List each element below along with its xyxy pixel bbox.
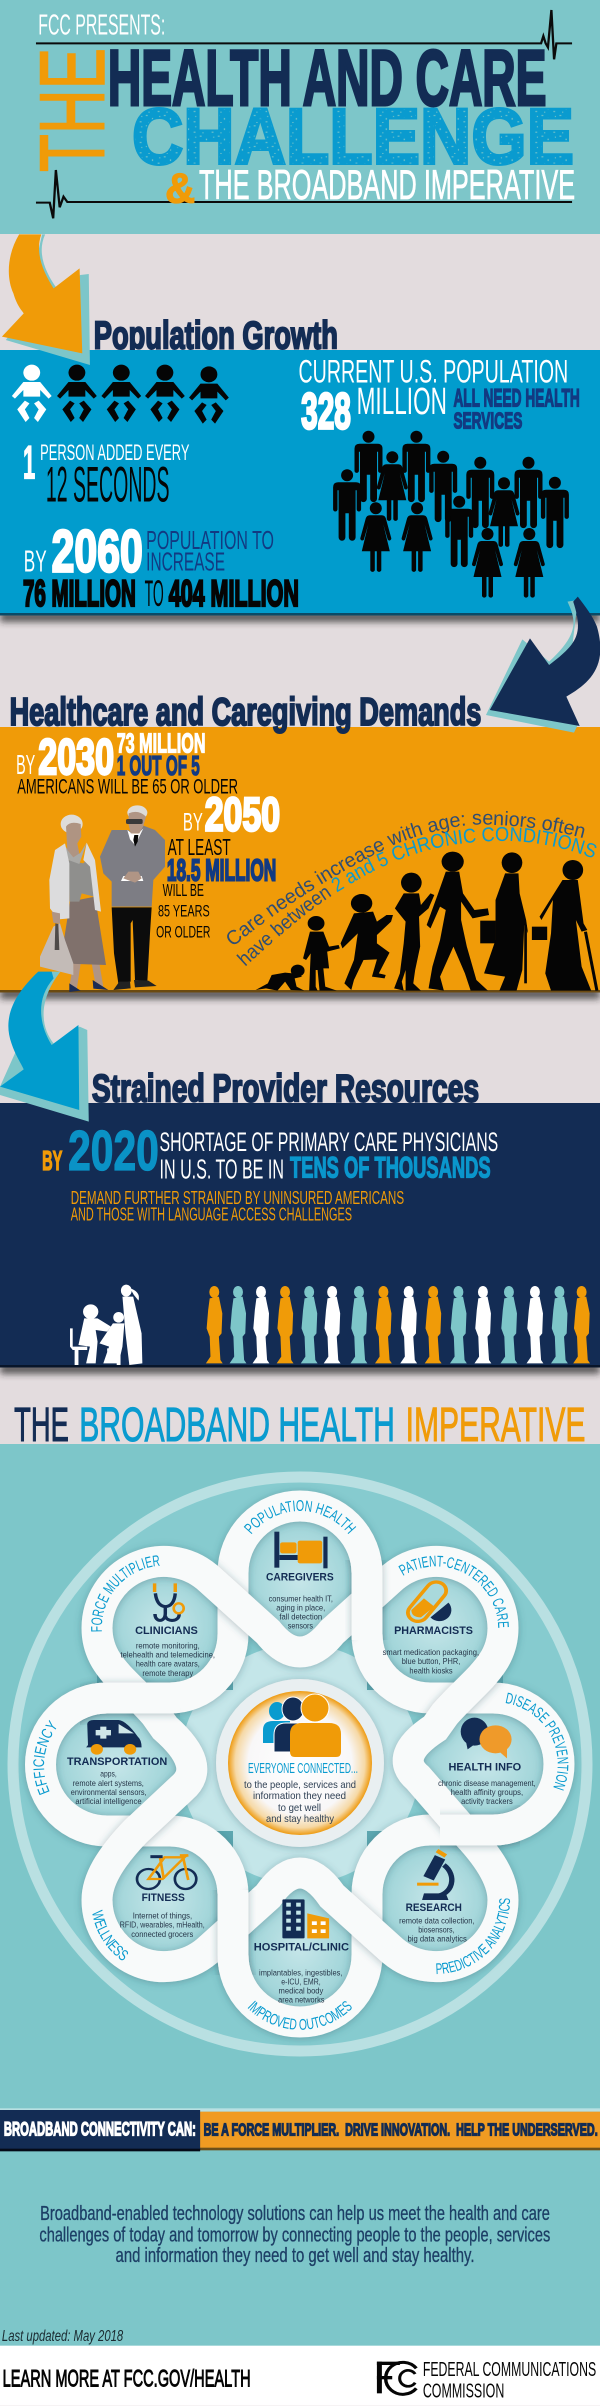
stat: 2030: 2030 — [38, 729, 114, 785]
petal: clinicians: telehealth and telemedicine, — [121, 1650, 215, 1660]
stat: current population: MILLION — [357, 380, 447, 422]
petal: fitness: Internet of things, — [133, 1911, 192, 1920]
illustration: doctor and patient — [70, 1285, 142, 1365]
stat: 2050: OR OLDER — [156, 923, 210, 941]
orange panel — [0, 727, 600, 992]
population stats — [12, 354, 580, 614]
ampersand: & — [165, 165, 195, 212]
ribbon label: improved outcomes: IMPROVED OUTCOMES — [248, 2000, 352, 2030]
petal: health info: HEALTH INFO — [448, 1760, 521, 1773]
stat: one person every 12 seconds — [23, 436, 189, 513]
title text block — [36, 8, 575, 218]
panel shadow — [0, 612, 600, 622]
icon: pill — [411, 1591, 451, 1621]
stat: one person every 12 seconds: PERSON ADDED EVERY — [40, 440, 189, 466]
title text block: FCC PRESENTS: — [38, 8, 165, 41]
text: further demand — [71, 1188, 404, 1225]
navy panel — [0, 1103, 600, 1367]
petal: pharmacists: blue button, PHR, — [402, 1657, 460, 1666]
petal: caregivers: sensors — [288, 1621, 313, 1631]
petal: transportation: apps, — [100, 1769, 117, 1779]
stat: 2060 population: TO — [145, 573, 164, 614]
banner: broadband connectivity can — [0, 2108, 600, 2151]
stat: 2020: 2020 — [68, 1119, 159, 1182]
section: strained provider resources — [0, 972, 600, 1374]
arrow: navy — [486, 597, 600, 733]
petal: hospital/clinic: e-ICU, EMR, — [281, 1977, 321, 1986]
center badge: everyone connected: EVERYONE CONNECTED... — [248, 1760, 358, 1777]
upper petals content — [121, 1532, 479, 1678]
stat: 2020 — [42, 1119, 159, 1182]
stat: 2050: 85 YEARS — [158, 902, 210, 920]
petal: clinicians — [121, 1583, 215, 1678]
petal: research: biosensors, — [418, 1925, 455, 1934]
stat: 2030: AMERICANS WILL BE 65 OR OLDER — [17, 775, 238, 798]
illustration: elderly couple — [40, 805, 165, 992]
petal: transportation: environmental sensors, — [71, 1788, 147, 1797]
curved text: chronic conditions: have between 2 and 5 CHRONIC CONDITIONS — [236, 826, 596, 966]
center badge: everyone connected: to the people, services and — [244, 1779, 356, 1791]
petal: clinicians: CLINICIANS — [135, 1624, 198, 1637]
center badge: everyone connected: information they need — [253, 1790, 346, 1802]
petal: research: remote data collection, — [399, 1916, 474, 1925]
stat: 2060 population: 404 MILLION — [169, 573, 299, 614]
section: healthcare and caregiving demands — [0, 596, 600, 1004]
panel shadow — [0, 1364, 600, 1374]
federal communications commission — [423, 2358, 596, 2402]
ribbon label: efficiency: EFFICIENCY — [33, 1720, 56, 1796]
stat: 2030: BY — [16, 750, 35, 781]
icon: buildings — [282, 1899, 329, 1938]
petal: hospital/clinic: area networks — [278, 1995, 325, 2005]
stat: 2060 population: POPULATION TO — [146, 526, 274, 556]
petal: research: big data analytics — [408, 1934, 467, 1944]
lower petals content — [67, 1718, 536, 2005]
footer area — [0, 2108, 600, 2406]
petal: hospital/clinic: implantables, ingestibles, — [259, 1968, 342, 1977]
petal: pharmacists: health kiosks — [409, 1666, 453, 1675]
illustration: queue of patients — [206, 1286, 590, 1363]
stat: 2050: AT LEAST — [168, 835, 231, 861]
ribbon label: disease prevention: DISEASE PREVENTION — [506, 1692, 568, 1791]
section: population growth — [0, 234, 600, 622]
petal: hospital/clinic: HOSPITAL/CLINIC — [254, 1940, 349, 1953]
icon: bed — [274, 1532, 328, 1568]
ribbon label: patient-centered care: PATIENT-CENTERED CARE — [398, 1556, 509, 1628]
petal: pharmacists — [383, 1591, 479, 1675]
center badge: everyone connected: to get well — [278, 1802, 321, 1814]
arrow: orange — [2, 234, 90, 365]
elderly woman — [40, 815, 108, 992]
ribbon label: force multiplier: FORCE MULTIPLIER — [91, 1555, 160, 1632]
petal: health info: health affinity groups, — [451, 1788, 523, 1797]
demand stats — [16, 728, 597, 991]
stat: one person every 12 seconds: 1 — [23, 436, 35, 489]
FCC logo — [377, 2362, 416, 2394]
petal: fitness: FITNESS — [142, 1891, 185, 1904]
heading: Population Growth — [94, 313, 338, 357]
stat: current population: 328 — [301, 382, 351, 439]
teal background — [0, 1444, 600, 2346]
petal: transportation — [67, 1720, 167, 1806]
petal: transportation: TRANSPORTATION — [67, 1755, 167, 1768]
petal: clinicians: remote therapy — [142, 1669, 194, 1678]
petal: transportation: artificial intelligence — [75, 1797, 142, 1806]
learn more: LEARN MORE AT FCC.GOV/HEALTH — [3, 2366, 251, 2392]
stat: 2050: 2050 — [205, 788, 280, 841]
white ribbon — [41, 1506, 559, 2022]
petal interiors — [41, 1506, 559, 2022]
stat: 2050: 18.5 MILLION — [167, 854, 276, 888]
petal: clinicians: remote monitoring, — [136, 1641, 200, 1650]
petal: caregivers: consumer health IT, — [269, 1594, 333, 1604]
icons: babies — [12, 365, 229, 424]
petal: transportation: remote alert systems, — [73, 1779, 144, 1788]
white footer — [0, 2346, 600, 2406]
line with heartbeat top — [36, 10, 572, 59]
petal: health info: activity trackers — [461, 1797, 513, 1806]
icons: crowd of people — [333, 431, 569, 598]
stat: 2020: BY — [42, 1146, 62, 1177]
petal: research: RESEARCH — [406, 1901, 462, 1914]
petal: health info: chronic disease management, — [438, 1779, 536, 1788]
icon: speech bubbles — [461, 1718, 512, 1758]
stat: current population — [298, 354, 580, 439]
last updated: Last updated: May 2018 — [2, 2328, 124, 2345]
stat: 2060 population — [23, 518, 299, 614]
stat: 2030: 1 OUT OF 5 — [117, 751, 200, 782]
petal: fitness — [120, 1855, 205, 1939]
curved text: care needs: Care needs increase with age: seniors often — [227, 811, 584, 944]
icon: ambulance — [86, 1720, 142, 1755]
closing paragraph — [39, 2201, 550, 2267]
ribbon label: wellness: WELLNESS — [92, 1910, 128, 1960]
petal: fitness: connected grocers — [131, 1930, 194, 1939]
stat: 2050: BY — [183, 808, 203, 836]
section: broadband health imperative — [0, 1398, 600, 2346]
petal: pharmacists: smart medication packaging, — [383, 1648, 479, 1657]
petal: clinicians: health care avatars, — [136, 1659, 200, 1669]
banner: broadband connectivity can: BROADBAND CONNECTIVITY CAN: — [4, 2119, 196, 2140]
petal: pharmacists: PHARMACISTS — [394, 1624, 473, 1637]
stat: 2060 population: 76 MILLION — [23, 573, 136, 614]
text: shortage of physicians: IN U.S. TO BE IN — [160, 1154, 284, 1185]
stat: 2060 population: 2060 — [52, 518, 143, 585]
illustration: ages silhouettes — [256, 852, 597, 991]
arrow: blue — [0, 972, 89, 1122]
center badge: everyone connected: and stay healthy — [266, 1813, 335, 1825]
petal: caregivers: fall detection — [279, 1612, 322, 1622]
population stats: 12 SECONDS — [46, 458, 170, 513]
shortage stats — [42, 1119, 590, 1365]
line with heartbeat bottom — [36, 170, 572, 218]
stat: 2060 population: INCREASE — [146, 547, 225, 577]
elderly man — [100, 805, 165, 990]
stat: current population: SERVICES — [453, 409, 522, 434]
petal: hospital/clinic — [254, 1899, 349, 2005]
center badge: everyone connected — [216, 1679, 384, 1847]
petal: caregivers: aging in place, — [276, 1603, 325, 1613]
petal: health info — [438, 1718, 536, 1806]
stat: 2050: WILL BE — [163, 881, 204, 901]
petal: hospital/clinic: medical body — [279, 1986, 324, 1996]
stat: 2050 — [156, 788, 280, 941]
text: shortage of physicians — [160, 1128, 498, 1185]
icon: stethoscope — [155, 1583, 184, 1620]
stat: 2060 population: BY — [24, 545, 47, 579]
header banner — [0, 0, 600, 234]
center star background — [180, 1644, 420, 1884]
blue panel — [0, 350, 600, 615]
heading: THE — [14, 1398, 69, 1452]
icon: three people — [263, 1694, 341, 1757]
icon: bicycle — [137, 1855, 196, 1889]
ribbon label: predictive analytics: PREDICTIVE ANALYTICS — [436, 1898, 510, 1974]
petal: research — [399, 1851, 474, 1944]
stat: 2030 — [16, 728, 238, 798]
ribbon label: population health: POPULATION HEALTH — [244, 1500, 356, 1534]
outer ring — [13, 1477, 587, 2051]
petal: caregivers — [266, 1532, 334, 1631]
icon: microscope — [417, 1851, 452, 1900]
petal: fitness: RFID, wearables, mHealth, — [120, 1920, 205, 1930]
stat: 2030: 73 MILLION — [117, 728, 205, 759]
petal: caregivers: CAREGIVERS — [266, 1570, 334, 1583]
federal communications commission: COMMISSION — [423, 2380, 504, 2402]
panel shadow — [0, 989, 600, 999]
